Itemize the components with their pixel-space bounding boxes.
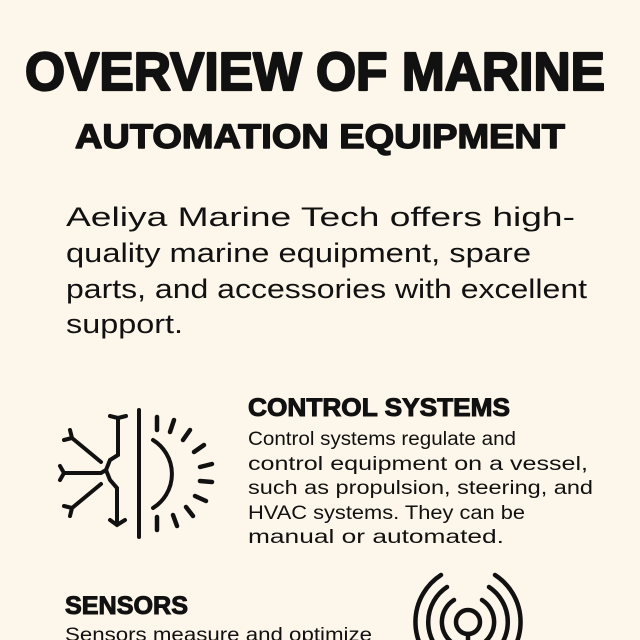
- intro paragraph: [66, 202, 588, 339]
- icon: snowflake and sun: [60, 410, 212, 537]
- text: control systems description: control equipment on a vessel,: [248, 454, 588, 475]
- title: OVERVIEW OF MARINE: [25, 42, 605, 102]
- text: control systems description: such as propulsion, steering, and: [248, 478, 593, 499]
- intro paragraph: parts, and accessories with excellent: [66, 274, 588, 304]
- intro paragraph: Aeliya Marine Tech offers high-: [66, 202, 575, 232]
- heading: sensors: SENSORS: [65, 592, 188, 620]
- intro paragraph: support.: [66, 309, 183, 339]
- icon: wireless sensor: [415, 575, 521, 640]
- text: control systems description: manual or automated.: [248, 527, 504, 548]
- title: AUTOMATION EQUIPMENT: [75, 118, 565, 156]
- title: [25, 42, 605, 156]
- text: control systems description: Control systems regulate and: [248, 429, 516, 450]
- heading: control systems: CONTROL SYSTEMS: [248, 394, 510, 422]
- text: control systems description: HVAC systems. They can be: [248, 503, 525, 524]
- text: control systems description: [248, 429, 593, 548]
- intro paragraph: quality marine equipment, spare: [66, 238, 531, 268]
